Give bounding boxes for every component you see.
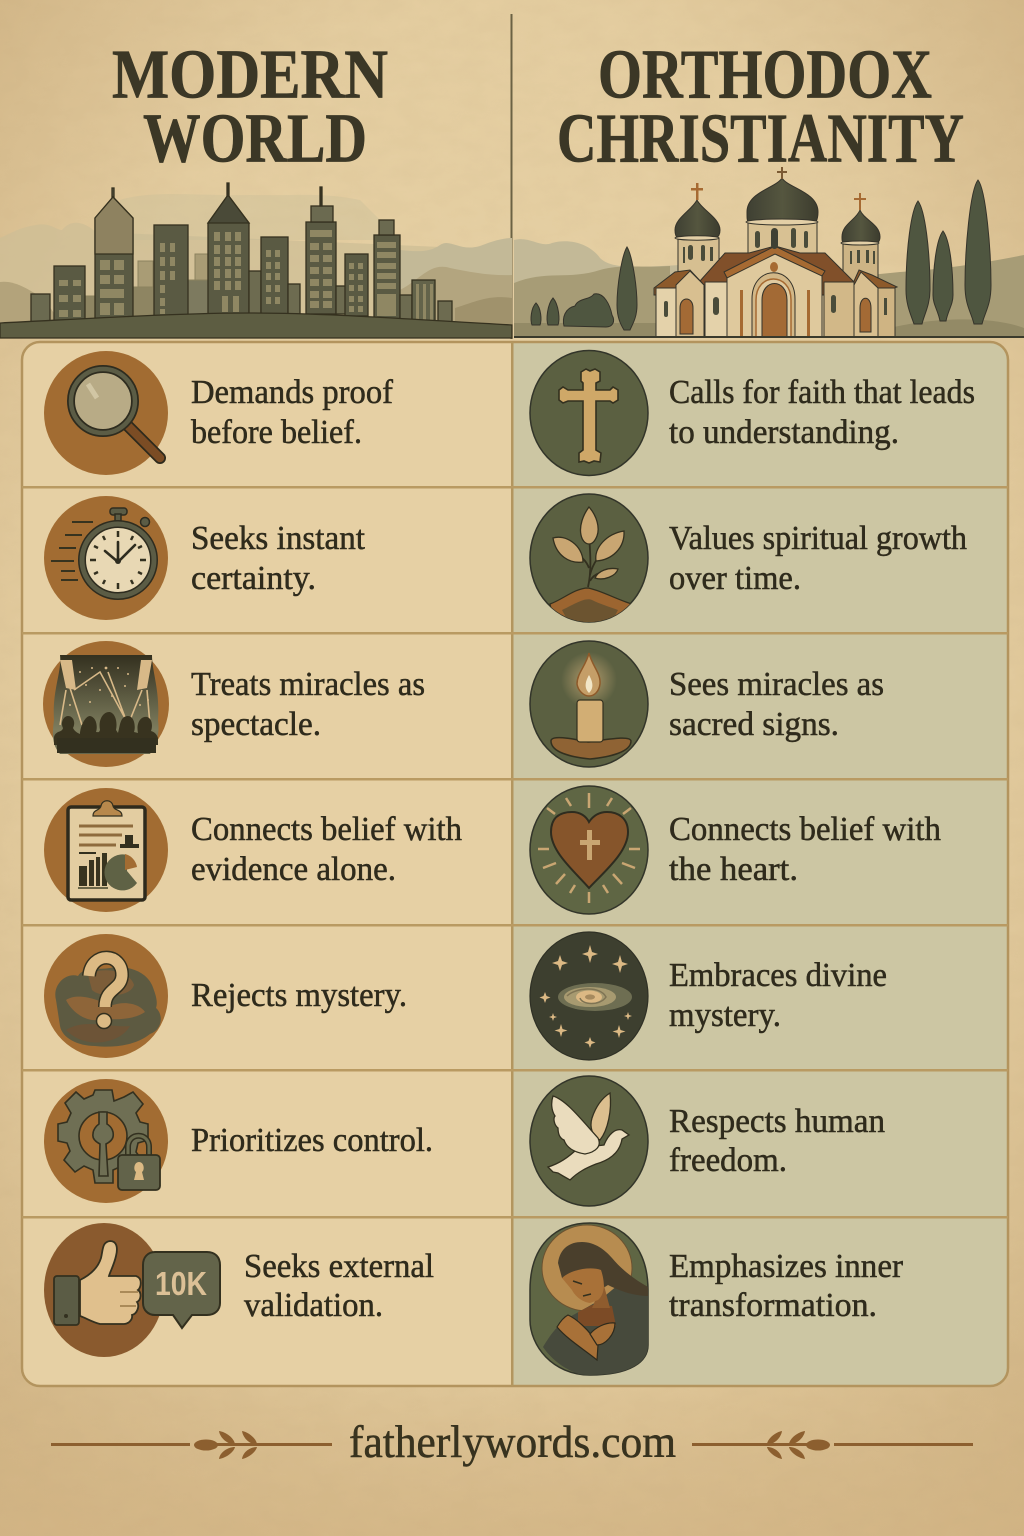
text: sacred signs: Sees miracles as <box>669 666 884 703</box>
text: sacred signs: sacred signs. <box>669 706 839 743</box>
footer website: fatherlywords.com <box>349 1416 676 1467</box>
heading: Modern World: MODERN <box>112 36 388 114</box>
illustration: Orthodox church <box>514 167 1024 338</box>
center divider <box>510 14 512 339</box>
icon: candle <box>530 641 648 767</box>
icon: gear and lock <box>44 1079 168 1203</box>
text: the heart: the heart. <box>669 851 798 888</box>
icon: dove <box>530 1076 648 1206</box>
text: demands proof: Demands proof <box>191 374 394 411</box>
text: the heart <box>669 811 941 888</box>
icon: growing plant <box>530 494 648 625</box>
icon: magnifying glass <box>44 351 168 475</box>
text: sacred signs <box>669 666 884 743</box>
text: seeks external: Seeks external <box>244 1248 434 1285</box>
text: inner transformation <box>669 1248 904 1324</box>
heading: Orthodox Christianity: ORTHODOX <box>598 36 932 114</box>
text: connects evidence: Connects belief with <box>191 811 462 848</box>
text: connects evidence: evidence alone. <box>191 851 396 888</box>
text: seeks instant: Seeks instant <box>191 520 366 557</box>
heading: Orthodox Christianity <box>557 36 964 178</box>
text: divine mystery <box>669 957 887 1034</box>
text: treats miracles: Treats miracles as <box>191 666 425 703</box>
icon: cross <box>530 350 648 476</box>
text: seeks instant <box>191 520 366 597</box>
text: seeks external <box>244 1248 434 1324</box>
text: treats miracles: spectacle. <box>191 706 321 743</box>
text: the heart: Connects belief with <box>669 811 941 848</box>
text: treats miracles <box>191 666 425 743</box>
icon: heart with cross <box>530 786 648 914</box>
text: inner transformation: Emphasizes inner <box>669 1248 904 1285</box>
icon: galaxy and stars <box>530 932 648 1060</box>
comparison table frame <box>22 342 1008 1386</box>
text: calls for faith <box>669 374 975 451</box>
text: divine mystery: mystery. <box>669 997 781 1034</box>
text: spiritual growth: Values spiritual growth <box>669 520 967 557</box>
text: calls for faith: Calls for faith that leads <box>669 374 975 411</box>
icon: praying saint with halo <box>530 1223 650 1375</box>
text: prioritizes control: Prioritizes control. <box>191 1122 433 1159</box>
illustration: city skyline <box>0 183 512 338</box>
text: rejects mystery: Rejects mystery. <box>191 977 407 1014</box>
icon: question in cloud <box>44 934 168 1058</box>
text: human freedom: Respects human <box>669 1103 885 1140</box>
text: human freedom: freedom. <box>669 1142 787 1179</box>
text: divine mystery: Embraces divine <box>669 957 887 994</box>
text: demands proof: before belief. <box>191 414 362 451</box>
text: seeks external: validation. <box>244 1287 383 1324</box>
footer ornament right <box>692 1431 973 1459</box>
text: human freedom <box>669 1103 885 1179</box>
text: seeks instant: certainty. <box>191 560 316 597</box>
text: inner transformation: transformation. <box>669 1287 877 1324</box>
icon: thumbs up with 10K bubble <box>44 1223 220 1357</box>
text: spiritual growth: over time. <box>669 560 801 597</box>
icon: thumbs up with 10K bubble: 10K <box>155 1265 207 1302</box>
heading: Modern World: WORLD <box>143 100 367 178</box>
text: calls for faith: to understanding. <box>669 414 899 451</box>
text: spiritual growth <box>669 520 967 597</box>
icon: spectacle stage <box>43 641 169 767</box>
icon: clipboard report <box>44 788 168 912</box>
footer ornament left <box>51 1431 332 1459</box>
heading: Modern World <box>112 36 388 178</box>
text: demands proof <box>191 374 394 451</box>
text: connects evidence <box>191 811 462 888</box>
icon: stopwatch <box>44 496 168 620</box>
